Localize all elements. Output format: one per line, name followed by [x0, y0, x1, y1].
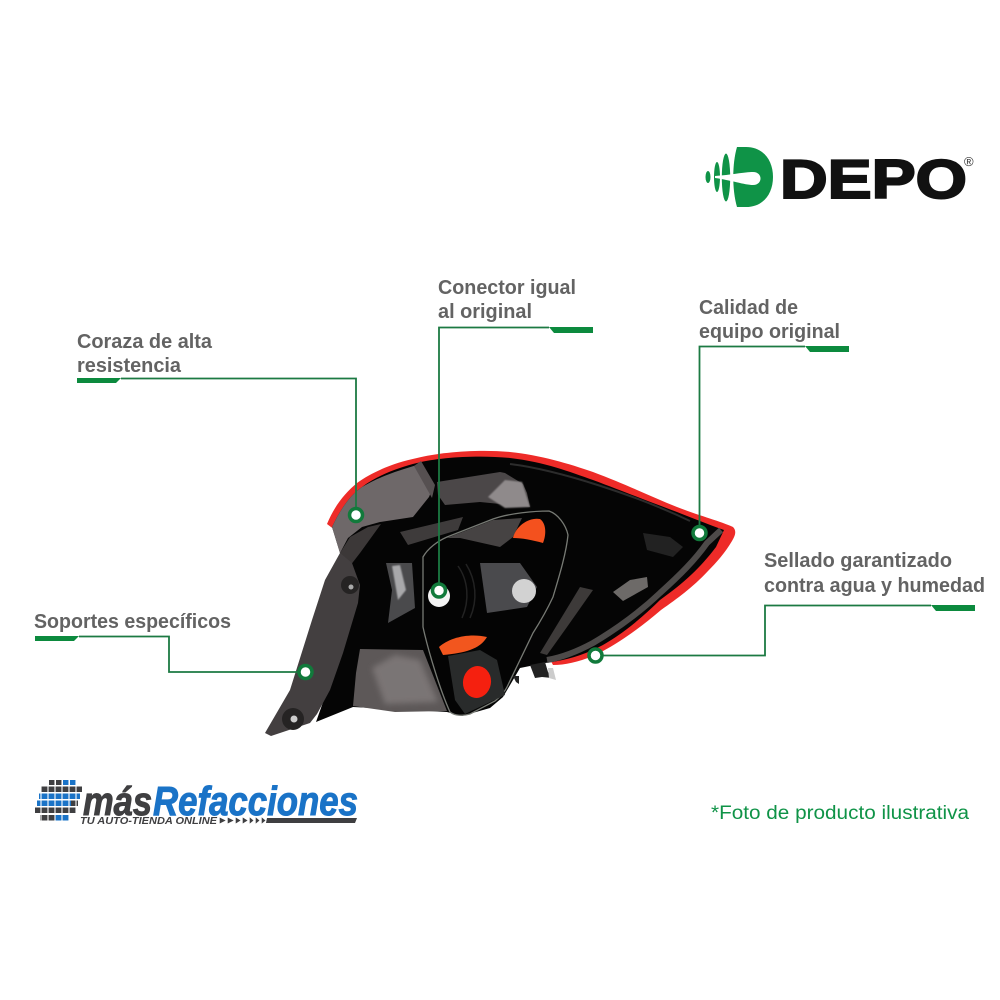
inner grey surfaces	[447, 518, 522, 547]
callout: Coraza de alta resistencia	[77, 331, 362, 522]
callout: Sellado garantizado	[589, 550, 985, 662]
marker	[693, 526, 706, 540]
label text: Sellado garantizado	[764, 550, 952, 572]
label text: al original	[438, 301, 532, 323]
leader line	[121, 378, 356, 515]
green underline	[77, 378, 121, 383]
label text: Conector igual	[438, 277, 576, 299]
icon: pixel grid	[35, 779, 82, 822]
leader line	[439, 328, 549, 590]
green underline	[35, 636, 79, 641]
registered mark: ®	[964, 154, 974, 169]
green underline	[805, 346, 849, 352]
red reflector	[460, 664, 494, 700]
label text: equipo original	[699, 321, 840, 343]
red lens rim	[327, 451, 735, 665]
leader line	[700, 346, 805, 533]
marker	[432, 584, 446, 597]
callout: Calidad de equipo original	[693, 297, 849, 540]
bulb socket ribs	[458, 564, 475, 618]
label text: resistencia	[77, 355, 182, 377]
green underline	[931, 605, 975, 611]
marker	[299, 666, 312, 678]
bracket bolt top	[341, 576, 359, 594]
grey shell upper left	[332, 465, 433, 553]
tagline bar	[266, 818, 357, 823]
tail lamp product photo	[265, 451, 735, 736]
callout: Soportes especificos	[34, 611, 312, 678]
leader line	[596, 606, 931, 656]
label text: contra agua y humedad	[764, 575, 985, 597]
DEPO logo	[706, 147, 974, 210]
label text: Coraza de alta	[77, 331, 213, 353]
grey upper panel	[437, 472, 530, 507]
right side grey lens wall	[540, 587, 593, 655]
callout: Conector igual al original	[432, 277, 593, 597]
icon: DEPO green lamp	[706, 147, 773, 207]
grey strap	[414, 461, 435, 498]
orange reflector top	[513, 519, 545, 543]
bracket bolt bottom	[282, 708, 304, 730]
white bulb right	[512, 579, 536, 603]
tagline: TU AUTO-TIENDA ONLINE	[80, 816, 217, 827]
footnote: *Foto de producto ilustrativa	[711, 803, 969, 824]
lower grey shell	[353, 649, 447, 712]
black housing	[316, 457, 724, 722]
bulb socket grey area	[386, 563, 415, 623]
gasket outline	[423, 511, 568, 715]
marker	[589, 649, 602, 662]
green underline	[549, 327, 593, 333]
masRefacciones logo	[35, 778, 358, 827]
grey rim strip	[547, 530, 721, 660]
word: mas: más	[83, 780, 152, 824]
connector nubs	[530, 662, 552, 678]
leader line	[79, 636, 305, 672]
label text: Soportes específicos	[34, 611, 231, 633]
label text: Calidad de	[699, 297, 798, 319]
chevrons	[220, 818, 265, 823]
word: Refacciones: Refacciones	[153, 778, 358, 824]
white bulb left	[428, 585, 450, 607]
orange reflector mid	[439, 635, 487, 655]
marker	[350, 508, 362, 522]
DEPO wordmark: DEPO	[780, 148, 967, 210]
bracket arm	[265, 553, 360, 736]
